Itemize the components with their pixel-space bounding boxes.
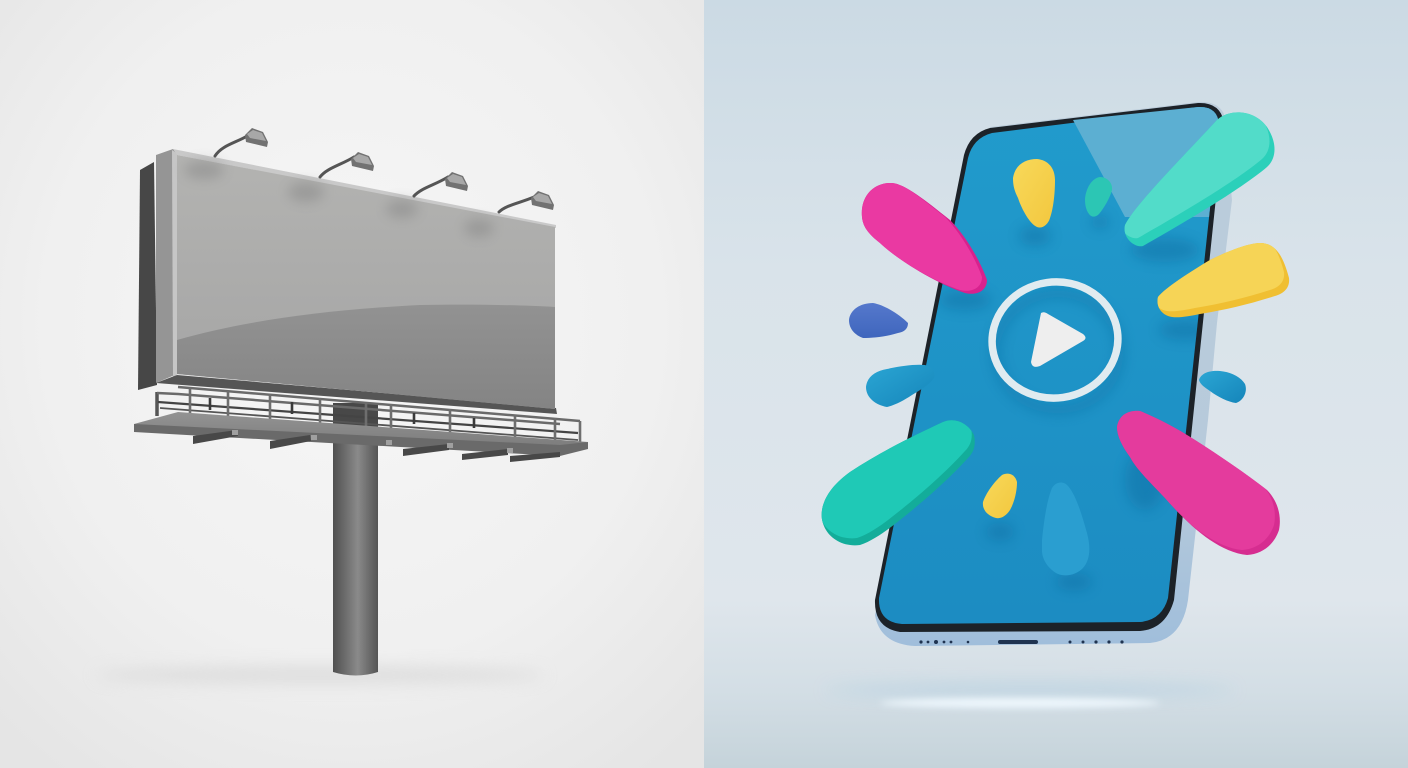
walkway railing (157, 387, 580, 444)
frame top edge (173, 149, 556, 228)
splash: small teal top (1085, 177, 1112, 217)
billboard lamps (215, 128, 554, 212)
screen glare (1073, 107, 1219, 217)
lamp arms (215, 135, 534, 212)
phone screen (879, 107, 1219, 624)
bracket caps (232, 430, 513, 453)
shadows on screen (939, 215, 1211, 591)
play ring (985, 274, 1125, 406)
splash: blue right (1199, 371, 1246, 403)
splash: teal bottom left (822, 420, 975, 546)
splash: pink upper left (862, 183, 987, 294)
splash: indigo left (849, 303, 908, 338)
pole upper shaded section (333, 403, 378, 427)
splash: teal top right (1124, 112, 1274, 246)
frame bottom edge (156, 375, 557, 414)
frame side (156, 149, 178, 383)
splash: pink bottom right (1117, 410, 1280, 555)
walkway brackets (193, 430, 560, 462)
walkway platform (134, 412, 588, 448)
frame highlight (172, 150, 178, 377)
pole (333, 403, 378, 676)
ground band under phone (825, 683, 1235, 697)
splash: yellow top (1013, 159, 1055, 228)
play triangle (1031, 312, 1086, 367)
lamp shadows on board (184, 161, 494, 237)
speaker holes and port (919, 640, 1124, 644)
panel: left background (0, 0, 704, 768)
icon: billboard (95, 128, 588, 684)
splash: blue left (866, 365, 935, 407)
back cabinet (138, 162, 157, 390)
board gloss lower (177, 305, 555, 409)
icon: play button (985, 274, 1125, 406)
walkway platform front edge (134, 424, 588, 456)
panel: right background (704, 0, 1408, 768)
lamp heads (245, 128, 554, 210)
splash: blue bottom (1042, 482, 1089, 575)
phone body (875, 102, 1232, 646)
ground glow under phone (880, 698, 1160, 708)
icon: smartphone (875, 102, 1232, 646)
splash: yellow bottom (983, 474, 1017, 518)
splash: yellow right (1158, 243, 1290, 318)
phone bezel (875, 103, 1224, 632)
board face (177, 155, 555, 409)
icon: colorful splashes (810, 100, 1300, 575)
ground shadow (95, 666, 545, 684)
